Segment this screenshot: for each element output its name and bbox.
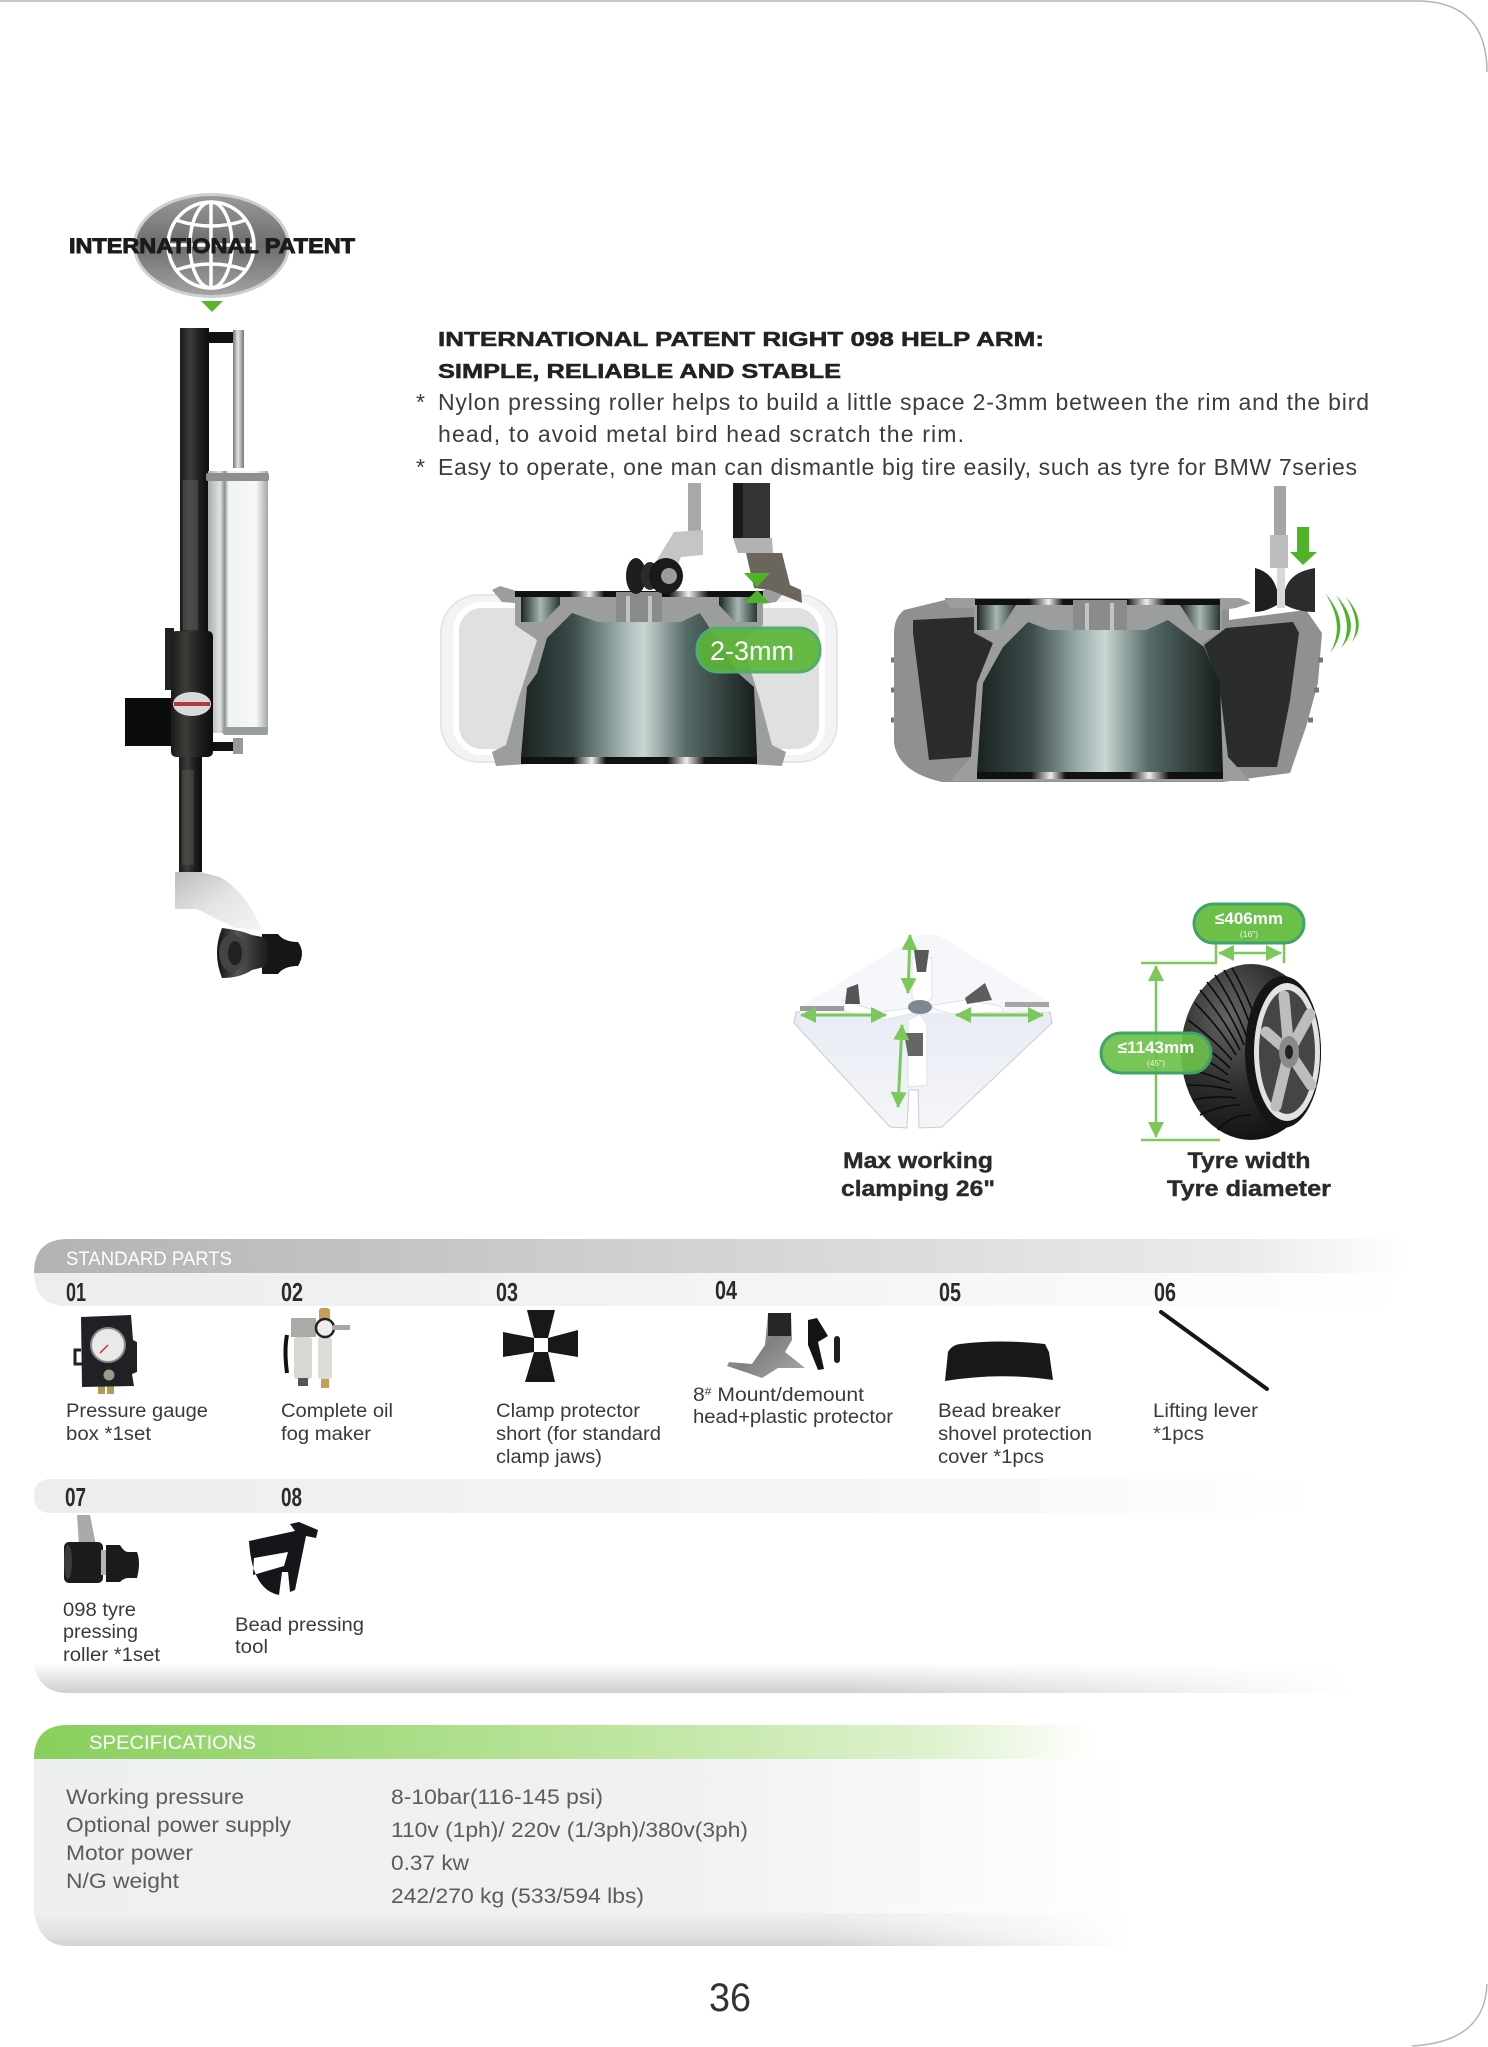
- spec names: Optional power supply: [66, 1813, 291, 1837]
- caption 07: pressing: [63, 1622, 138, 1643]
- bird head tool: [733, 483, 802, 603]
- section title: SPECIFICATIONS: [89, 1733, 256, 1754]
- caption 06: [1153, 1401, 1259, 1445]
- spec values: [391, 1785, 748, 1908]
- item 06 number: 06: [1154, 1277, 1176, 1307]
- item 07 number: 07: [65, 1482, 86, 1512]
- caption 01: Pressure gauge: [66, 1401, 208, 1422]
- text block: feature bullets: Nylon pressing roller helps to build a little space 2-3mm between the rim and the bird: [438, 389, 1369, 415]
- label: max working clamping: clamping 26": [841, 1176, 995, 1201]
- label: max working clamping: Max working: [843, 1148, 993, 1173]
- arrows: clamp travel: [801, 935, 1043, 1107]
- spec names: Working pressure: [66, 1785, 244, 1809]
- caption 05: cover *1pcs: [938, 1447, 1044, 1468]
- callout: tyre width: [1194, 904, 1304, 943]
- icon: tyre: [1181, 964, 1321, 1140]
- icon: pressure gauge box: [75, 1315, 137, 1394]
- section title: STANDARD PARTS: [66, 1249, 232, 1270]
- panel: specifications: [34, 1725, 1134, 1948]
- caption 01: box *1set: [66, 1424, 152, 1445]
- item 03 number: 03: [496, 1277, 518, 1307]
- caption 05: [938, 1401, 1092, 1468]
- icon: international patent logo: INTERNATIONAL PATENT: [69, 235, 355, 258]
- caption 04: 8: [693, 1385, 704, 1406]
- text block: feature bullets: *: [416, 454, 425, 480]
- callout: tyre width: (16"): [1240, 929, 1258, 939]
- spec names: Motor power: [66, 1841, 193, 1865]
- jaws and arms: [842, 950, 1004, 1087]
- caption 07: roller *1set: [63, 1645, 161, 1666]
- page number: 36: [709, 1976, 751, 2020]
- callout: tyre diameter: [1101, 1033, 1211, 1073]
- arrow: press down: [1290, 527, 1317, 565]
- caption 03: short (for standard: [496, 1424, 661, 1445]
- heading: SIMPLE, RELIABLE AND STABLE: [438, 361, 841, 383]
- caption 03: Clamp protector: [496, 1401, 641, 1422]
- caption 03: [496, 1401, 661, 1468]
- caption 06: *1pcs: [1153, 1424, 1204, 1445]
- spec values: 110v (1ph)/ 220v (1/3ph)/380v(3ph): [391, 1818, 748, 1842]
- diagram: clamping table: [794, 935, 1052, 1128]
- callout: tyre diameter: ≤1143mm: [1118, 1038, 1194, 1057]
- spec values: 8-10bar(116-145 psi): [391, 1785, 603, 1809]
- caption 04: head+plastic protector: [693, 1407, 894, 1428]
- row strip one: [34, 1273, 1410, 1306]
- heading: [438, 329, 1044, 383]
- item 01 number: 01: [66, 1277, 86, 1307]
- badge: 2-3mm: 2-3mm: [710, 636, 794, 666]
- caption 04: #: [705, 1386, 713, 1398]
- callout: tyre diameter: (45"): [1147, 1058, 1165, 1068]
- panel: standard parts: [34, 1239, 1410, 1695]
- text block: feature bullets: [416, 389, 1369, 480]
- caption 05: Bead breaker: [938, 1401, 1062, 1422]
- caption 02: Complete oil: [281, 1401, 393, 1422]
- callout: tyre width: ≤406mm: [1215, 909, 1283, 928]
- panel body: [34, 1759, 1134, 1914]
- header band: [34, 1725, 1095, 1759]
- help roller arm: [626, 483, 703, 594]
- label: tyre width and diameter: Tyre diameter: [1167, 1176, 1332, 1201]
- spec values: 242/270 kg (533/594 lbs): [391, 1884, 644, 1908]
- text block: feature bullets: head, to avoid metal bird head scratch the rim.: [438, 421, 964, 447]
- caption 04: Mount/demount: [712, 1385, 865, 1406]
- bottom band: [34, 1660, 1354, 1695]
- caption 03: clamp jaws): [496, 1447, 602, 1468]
- product photo: help arm: [125, 328, 302, 978]
- row strip two: [34, 1479, 1320, 1513]
- help arm roller pressing tyre: [1255, 486, 1315, 612]
- bottom band: [34, 1910, 1134, 1948]
- dimension lines: [1141, 943, 1284, 1140]
- diagram: help arm pressing big tyre: [891, 486, 1359, 782]
- caption 08: [235, 1615, 364, 1658]
- caption 05: shovel protection: [938, 1424, 1092, 1445]
- caption 02: [281, 1401, 393, 1445]
- diagram: tyre with size callouts: [1101, 904, 1321, 1140]
- icon: tyre pressing roller: [64, 1515, 139, 1583]
- badge: 2-3mm: [697, 628, 820, 672]
- item 04 number: 04: [715, 1275, 737, 1305]
- caption 08: tool: [235, 1637, 268, 1658]
- spec names: N/G weight: [66, 1869, 179, 1893]
- caption 07: 098 tyre: [63, 1600, 136, 1621]
- caption 07: [63, 1600, 161, 1666]
- heading: INTERNATIONAL PATENT RIGHT 098 HELP ARM:: [438, 329, 1044, 351]
- icon: vibration waves: [1325, 593, 1359, 653]
- icon: mount demount head: [727, 1313, 840, 1378]
- label: tyre width and diameter: [1167, 1148, 1332, 1201]
- text block: feature bullets: Easy to operate, one man can dismantle big tire easily, such as tyre for BMW 7series: [438, 454, 1357, 480]
- spec names: [66, 1785, 291, 1893]
- caption 08: Bead pressing: [235, 1615, 364, 1636]
- item 08 number: 08: [281, 1482, 302, 1512]
- icon: oil fog maker: [286, 1308, 350, 1388]
- label: tyre width and diameter: Tyre width: [1188, 1148, 1310, 1173]
- item 02 number: 02: [281, 1277, 303, 1307]
- spec values: 0.37 kw: [391, 1851, 469, 1875]
- icon: international patent logo: [69, 194, 355, 312]
- icon: clamp protector: [503, 1310, 578, 1382]
- caption 02: fog maker: [281, 1424, 372, 1445]
- caption 01: [66, 1401, 208, 1445]
- text block: feature bullets: *: [416, 389, 425, 415]
- icon: shovel protection cover: [945, 1342, 1053, 1381]
- icon: lifting lever: [1161, 1312, 1267, 1389]
- diagram: rim with help arm creating gap: [441, 483, 837, 766]
- caption 06: Lifting lever: [1153, 1401, 1259, 1422]
- caption 04: [693, 1385, 894, 1428]
- label: max working clamping: [841, 1148, 995, 1201]
- header band: [34, 1239, 1410, 1273]
- arrows: gap indicator: [744, 573, 770, 603]
- icon: bead pressing tool: [249, 1522, 318, 1595]
- item 05 number: 05: [939, 1277, 961, 1307]
